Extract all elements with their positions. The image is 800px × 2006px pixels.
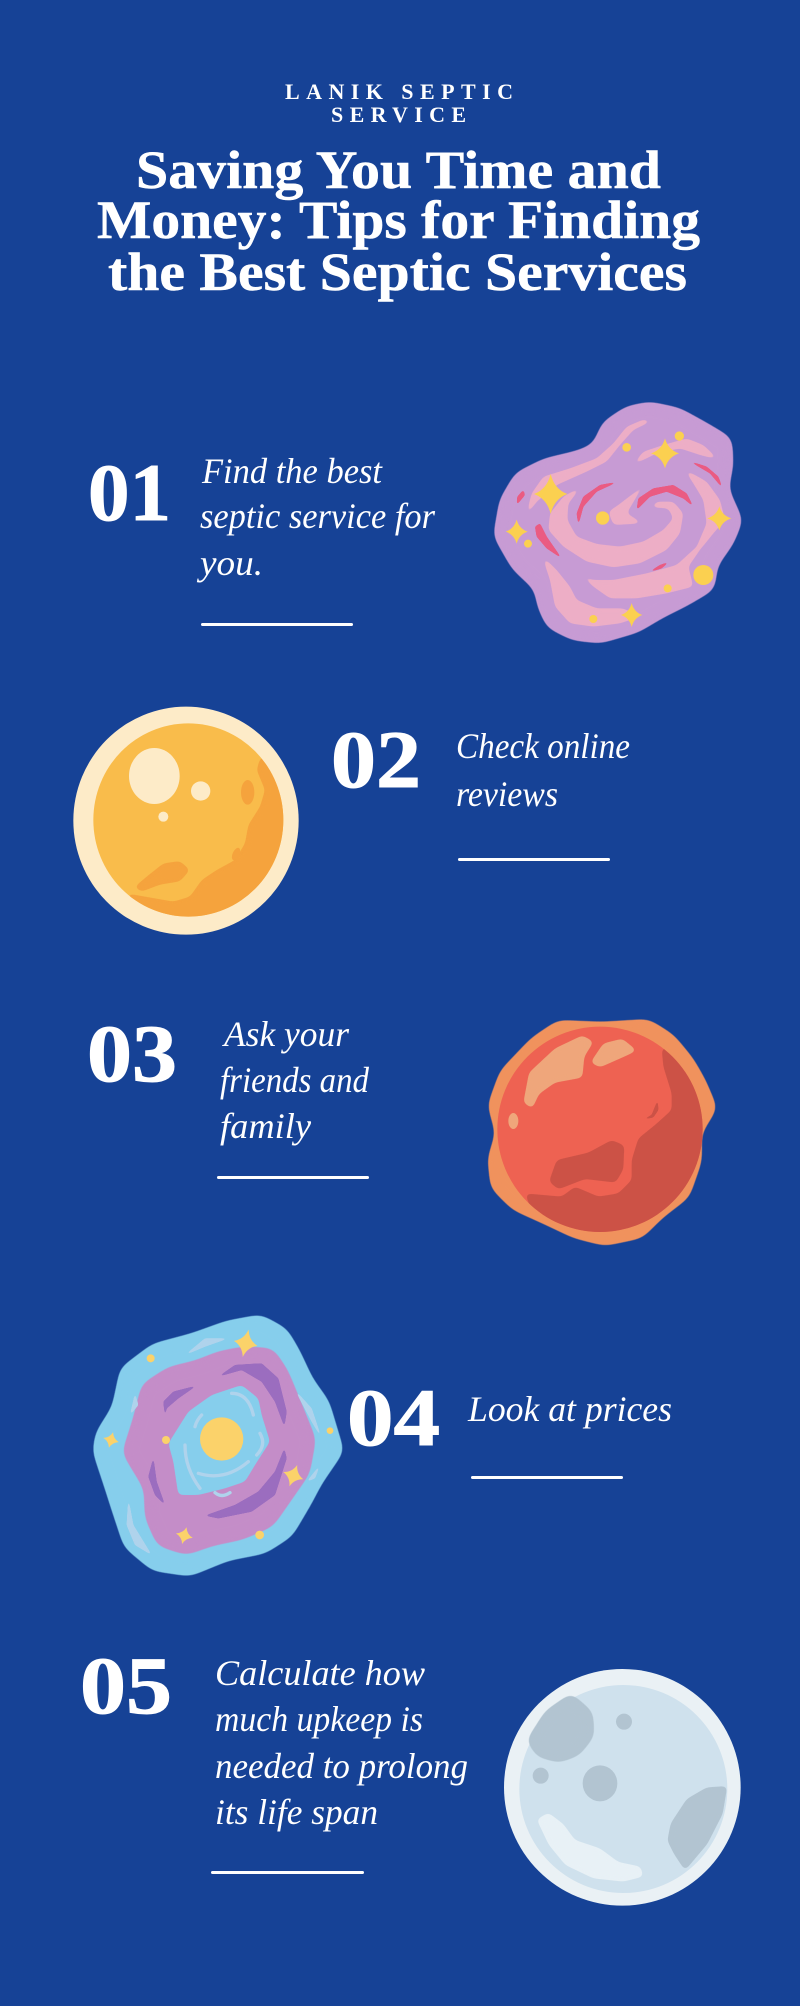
step 05 text: its life span <box>215 1792 378 1832</box>
icon: yellow planet <box>73 707 300 935</box>
step 02 text: reviews <box>456 774 558 814</box>
step 01 text <box>197 451 436 583</box>
step 05 text: Calculate how <box>215 1653 425 1693</box>
step 03 <box>87 1008 370 1179</box>
step 02 text: Check online <box>456 726 630 766</box>
icon: red planet <box>487 1019 718 1246</box>
step 03 text: Ask your <box>222 1014 350 1054</box>
step 03 text: friends and <box>220 1060 370 1100</box>
step 04 text: Look at prices <box>467 1389 672 1429</box>
header: company name: LANIK SEPTIC <box>285 79 513 104</box>
title: Money: Tips for Finding <box>97 190 700 250</box>
step 01 rule <box>201 623 353 626</box>
step 03 text <box>220 1014 370 1146</box>
step 05 text: needed to prolong <box>215 1746 468 1786</box>
header: company name <box>285 79 513 127</box>
number 05: 05 <box>80 1640 172 1731</box>
step 01 text: you. <box>197 543 263 583</box>
number 02: 02 <box>331 714 421 805</box>
title <box>97 140 700 302</box>
icon: moon <box>504 1669 741 1906</box>
step 04 rule <box>471 1476 623 1479</box>
number 01: 01 <box>88 447 171 538</box>
step 01 text: septic service for <box>200 496 436 536</box>
step 05 <box>80 1640 468 1874</box>
number 04: 04 <box>347 1372 440 1463</box>
number 03: 03 <box>87 1008 177 1099</box>
icon: pink galaxy <box>493 401 743 644</box>
title: Saving You Time and <box>136 140 661 200</box>
step 02 text <box>456 726 630 814</box>
step 01 text: Find the best <box>201 451 383 491</box>
title: the Best Septic Services <box>108 242 687 302</box>
step 03 text: family <box>220 1106 311 1146</box>
icon: blue galaxy <box>92 1314 344 1577</box>
step 04 <box>347 1372 672 1479</box>
step 05 rule <box>211 1871 364 1874</box>
step 02 rule <box>458 858 610 861</box>
step 05 text <box>215 1653 468 1832</box>
step 03 rule <box>217 1176 369 1179</box>
header: company name: SERVICE <box>331 102 466 127</box>
step 01 <box>88 447 436 626</box>
step 05 text: much upkeep is <box>215 1699 423 1739</box>
step 02 <box>331 714 630 861</box>
